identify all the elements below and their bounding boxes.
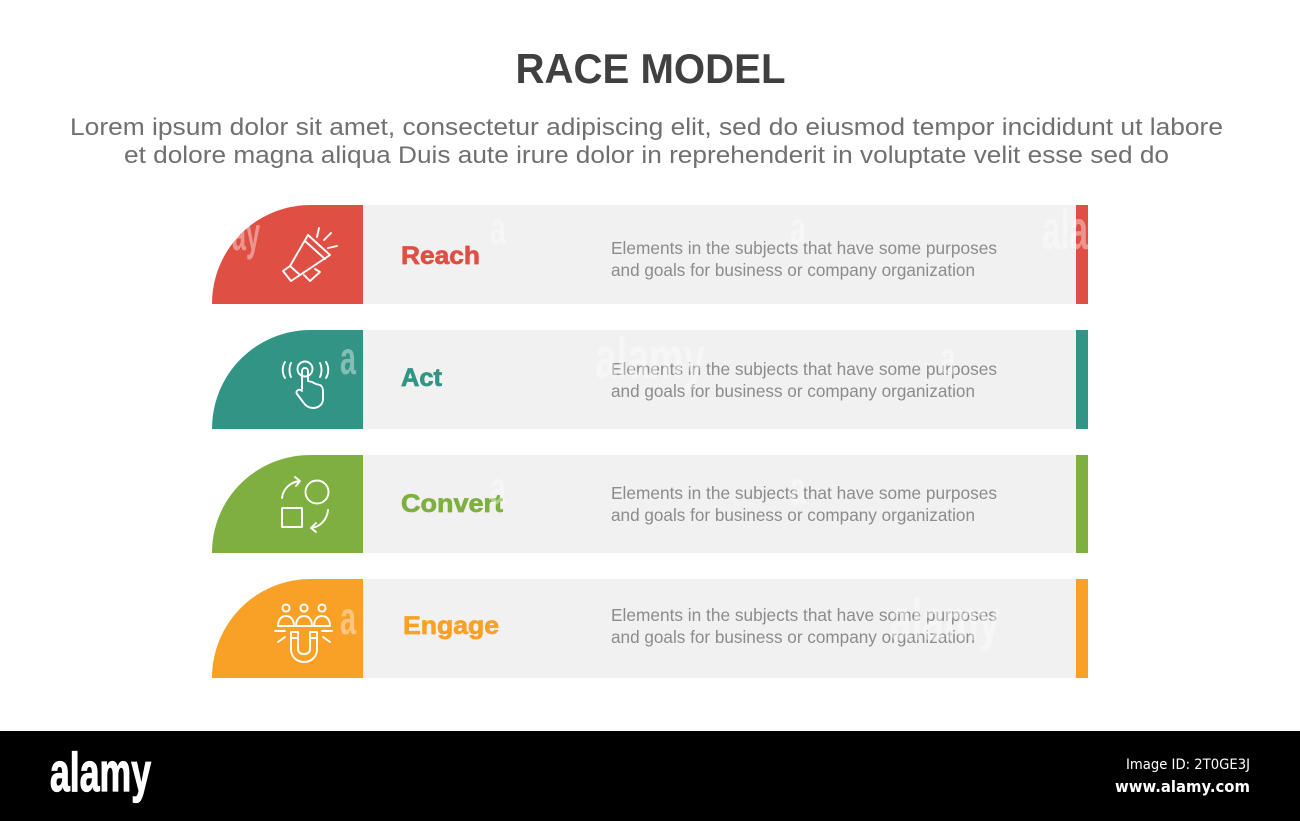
label: reach: Reach bbox=[401, 242, 480, 270]
icon: tapping hand bbox=[283, 362, 328, 408]
title: RACE MODEL bbox=[516, 45, 786, 92]
panel: convert: a bbox=[490, 462, 506, 514]
footer logo: alamy bbox=[50, 741, 151, 803]
panel: act: a bbox=[340, 332, 356, 384]
intro text block: Lorem ipsum dolor sit amet, consectetur adipiscing elit, sed do eiusmod tempor incididunt ut labore bbox=[70, 114, 1223, 141]
description: convert: and goals for business or company organization bbox=[611, 505, 975, 525]
panel: act bbox=[212, 326, 1088, 429]
panel: convert: a bbox=[790, 462, 806, 514]
panel: engage bbox=[212, 579, 1088, 678]
intro text block: et dolore magna aliqua Duis aute irure dolor in reprehenderit in voluptate velit esse sed do bbox=[124, 142, 1169, 169]
icon: shapes with arrows bbox=[282, 477, 328, 532]
description: engage: Elements in the subjects that have some purposes bbox=[611, 605, 997, 625]
label: convert: Convert bbox=[401, 490, 504, 518]
description: engage: and goals for business or company organization bbox=[611, 627, 975, 647]
panel: convert bbox=[212, 455, 1088, 553]
intro text block bbox=[70, 114, 1223, 169]
description: convert: Elements in the subjects that have some purposes bbox=[611, 483, 997, 503]
description: act bbox=[611, 359, 997, 401]
icon: megaphone bbox=[283, 228, 337, 281]
description: act: and goals for business or company organization bbox=[611, 381, 975, 401]
panel: act: alamy bbox=[595, 326, 705, 391]
website: www.alamy.com bbox=[1115, 777, 1250, 796]
panel: reach: a bbox=[790, 202, 806, 254]
label: engage: Engage bbox=[403, 612, 499, 640]
label: act: Act bbox=[401, 364, 443, 392]
description: engage bbox=[611, 605, 997, 647]
description: reach: and goals for business or company organization bbox=[611, 260, 975, 280]
footer bar bbox=[0, 731, 1300, 821]
panel: reach: ay bbox=[232, 208, 260, 260]
panel: engage: alamy bbox=[890, 588, 1000, 653]
description: reach bbox=[611, 238, 997, 280]
panel: reach bbox=[212, 198, 1088, 304]
icon: people and magnet bbox=[275, 604, 332, 662]
description: reach: Elements in the subjects that have some purposes bbox=[611, 238, 997, 258]
description: act: Elements in the subjects that have some purposes bbox=[611, 359, 997, 379]
panel: engage: a bbox=[340, 592, 356, 644]
panel: reach: ala bbox=[1042, 198, 1088, 261]
description: convert bbox=[611, 483, 997, 525]
image id: Image ID: 2T0GE3J bbox=[1126, 757, 1250, 773]
panel: reach: a bbox=[490, 202, 506, 254]
panel: act: a bbox=[940, 332, 956, 384]
